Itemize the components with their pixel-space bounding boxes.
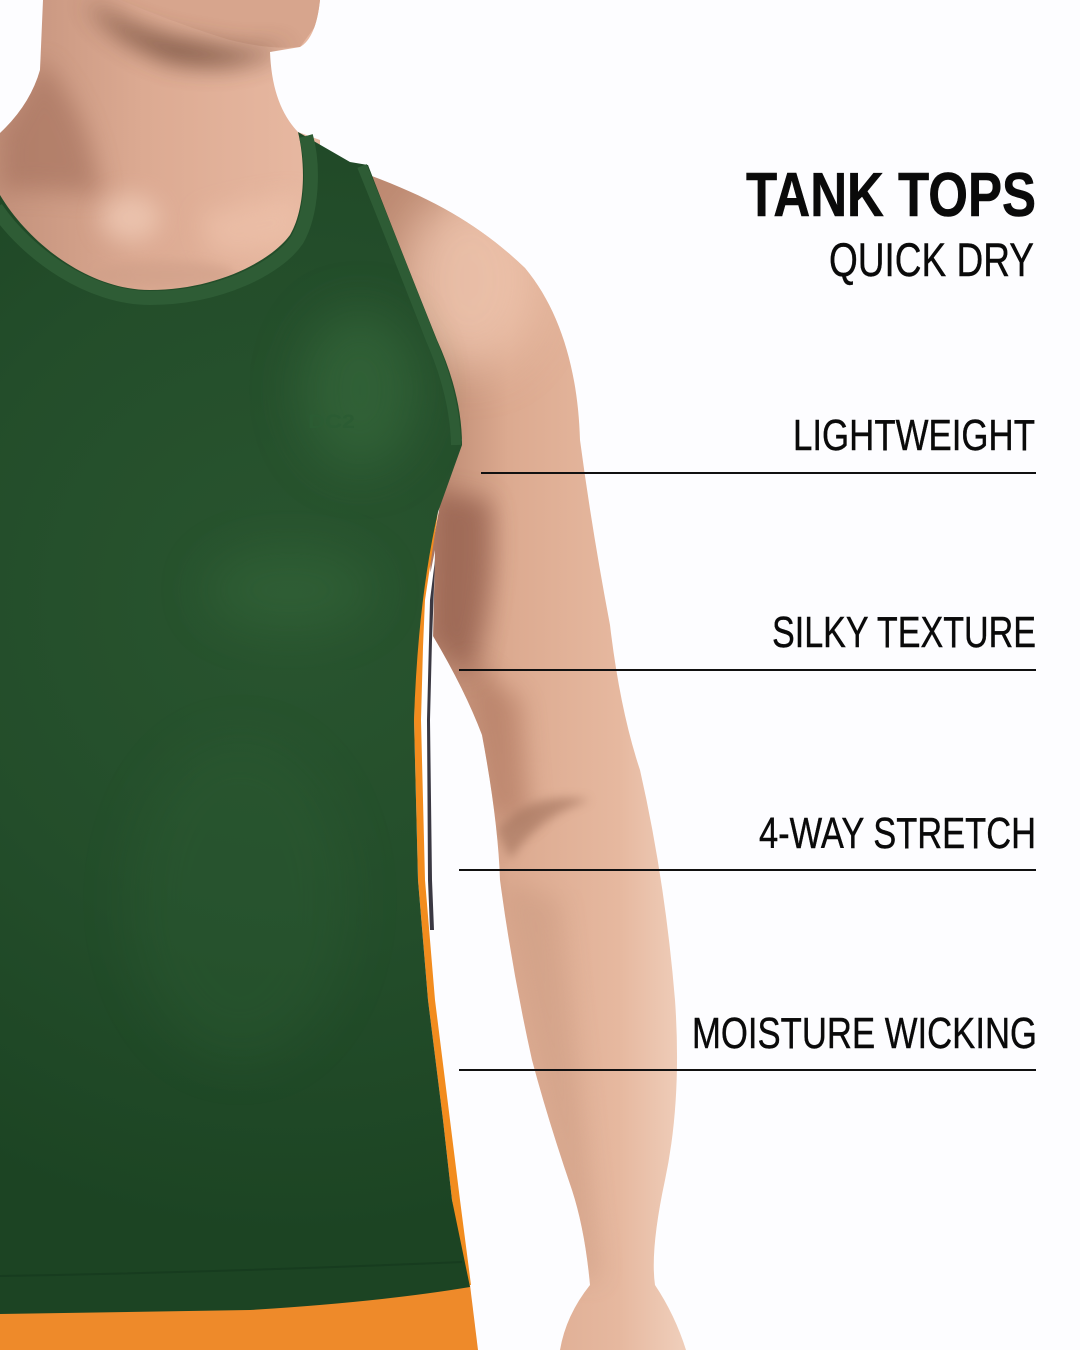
white piping — [421, 550, 435, 930]
collarbone highlight right — [213, 213, 278, 244]
model: neck and chest — [0, 0, 320, 290]
model: arm and shoulder — [350, 160, 690, 1350]
dark piping — [427, 560, 435, 930]
shirt sheen abdomen — [130, 740, 350, 1060]
arm inner shadow — [465, 660, 530, 820]
chin — [178, 0, 320, 48]
elbow crease — [497, 798, 590, 860]
neck binding — [0, 136, 311, 298]
neck side shade — [0, 60, 100, 195]
shirt sheen pec — [205, 550, 375, 630]
tank top — [0, 132, 470, 1314]
shorts — [0, 1285, 478, 1350]
shoulder light — [400, 190, 540, 370]
under-chin shade — [85, 0, 290, 66]
armhole binding — [362, 166, 456, 445]
orange piping — [414, 512, 471, 1285]
side stripes — [414, 512, 471, 1285]
collarbone highlight — [100, 194, 160, 242]
shirt sheen chest — [300, 310, 420, 470]
armpit shadow — [430, 490, 492, 680]
hem stitch — [0, 1262, 462, 1276]
chest hair shade — [144, 266, 228, 284]
logo: DC2 — [308, 412, 355, 433]
forearm shade — [514, 898, 593, 1273]
